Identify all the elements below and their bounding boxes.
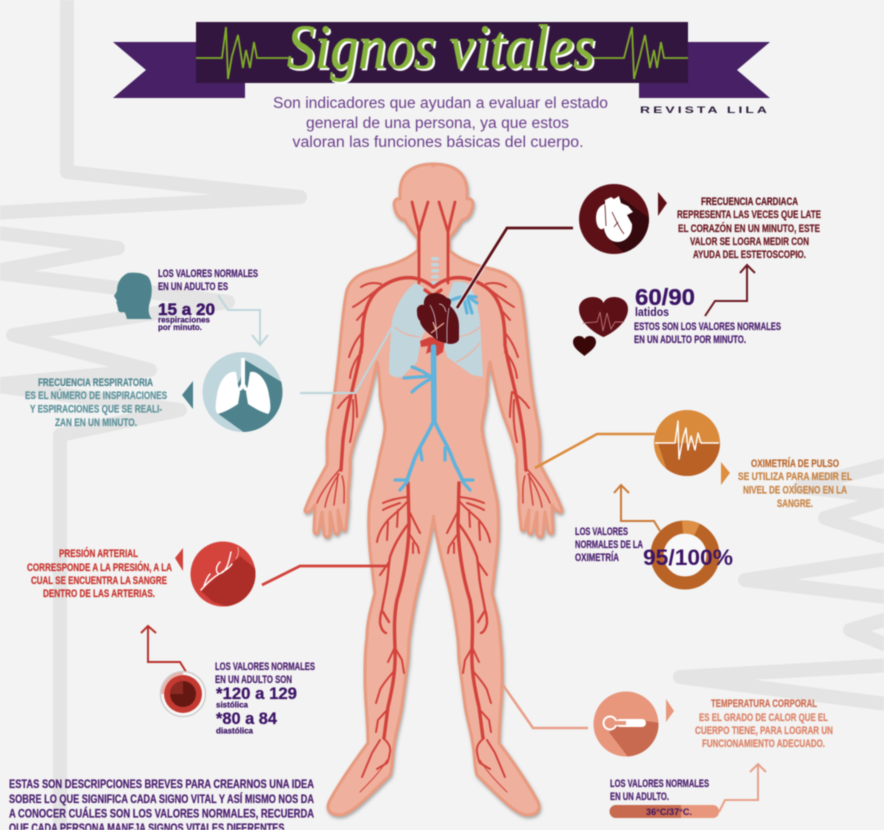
unit: por minuto. [158, 322, 202, 332]
ribbon left tail [113, 42, 245, 98]
description: EL CORAZÓN EN UN MINUTO, ESTE [678, 222, 820, 235]
gauge icon [160, 672, 206, 716]
closing note: A CONOCER CUÁLES SON LOS VALORES NORMALES, RECUERDA [9, 806, 314, 820]
neck artery top join [425, 290, 441, 296]
pointer [182, 381, 193, 409]
ribbon centre [196, 22, 688, 83]
icon: small heart [573, 336, 596, 356]
description: AYUDA DEL ESTETOSCOPIO. [693, 249, 806, 261]
background heartbeat pattern: left [0, 0, 300, 213]
description: REPRESENTA LAS VECES QUE LATE [677, 209, 821, 221]
values text: EN UN ADULTO POR MINUTO. [634, 334, 746, 346]
panel: temperatura corporal [503, 685, 833, 818]
arteries left [317, 202, 433, 792]
description [25, 377, 167, 429]
panel: frecuencia cardiaca [457, 184, 821, 356]
description [738, 457, 852, 510]
description: ZAN EN UN MINUTO. [55, 417, 137, 429]
title: Signos vitales [287, 14, 595, 82]
description: SE UTILIZA PARA MEDIR EL [738, 471, 852, 483]
connector [300, 327, 392, 393]
number: 15 a 20 [158, 300, 215, 319]
adult values text [158, 268, 258, 293]
human body [305, 164, 562, 815]
arrow [705, 265, 755, 316]
description: ES EL NÚMERO DE INSPIRACIONES [25, 389, 167, 402]
values text: EN UN ADULTO. [610, 791, 669, 803]
description: CORRESPONDE A LA PRESIÓN, A LA [27, 561, 172, 574]
panel: presion arterial [27, 542, 390, 736]
arrow [141, 626, 188, 675]
aorta [420, 337, 445, 356]
donut chart [657, 527, 713, 583]
description [695, 698, 833, 750]
values text [610, 778, 709, 803]
connector [535, 434, 655, 468]
panel: oximetria de pulso [535, 410, 852, 583]
unit [158, 314, 210, 332]
pointer [175, 548, 183, 571]
values text: LOS VALORES [575, 526, 628, 538]
arrow [719, 764, 766, 812]
systolic value: sistólica [216, 700, 248, 710]
background heartbeat pattern: right [680, 463, 884, 705]
closing note: ESTAS SON DESCRIPCIONES BREVES PARA CREARNOS UNA IDEA [9, 777, 314, 791]
description: FUNCIONAMIENTO ADECUADO. [702, 738, 825, 750]
icon: head [114, 273, 152, 319]
description [677, 196, 821, 261]
systolic value: *120 a 129 [216, 685, 297, 703]
diastolic value: *80 a 84 [216, 710, 278, 728]
subtitle: valoran las funciones básicas del cuerpo. [292, 134, 584, 151]
unit: respiraciones [158, 314, 210, 324]
lungs [389, 282, 483, 377]
description: FRECUENCIA RESPIRATORIA [38, 377, 153, 389]
heartbeat line left [196, 27, 290, 79]
heartbeat line right [585, 27, 688, 79]
unit: latidos [635, 305, 669, 319]
description [27, 547, 172, 600]
description: TEMPERATURA CORPORAL [711, 698, 817, 710]
closing note [9, 777, 314, 830]
arrow [218, 295, 268, 345]
description: CUAL SE ENCUENTRA LA SANGRE [31, 575, 167, 587]
description: NIVEL DE OXÍGENO EN LA [743, 484, 847, 496]
pointer [721, 462, 730, 485]
description: FRECUENCIA CARDIACA [701, 196, 798, 208]
pointer [658, 192, 667, 216]
icon: pulse [654, 410, 722, 480]
subtitle: Son indicadores que ayudan a evaluar el estado [273, 95, 608, 112]
panel: frecuencia respiratoria [25, 268, 392, 436]
description: DENTRO DE LAS ARTERIAS. [43, 588, 155, 600]
trachea [431, 257, 439, 284]
icon: big heart [579, 297, 628, 337]
background heartbeat pattern: left middle [0, 232, 228, 830]
number: 60/90 [635, 284, 695, 310]
icon: artery [190, 540, 256, 608]
description: CUERPO TIENE, PARA LOGRAR UN [695, 725, 833, 737]
number: 95/100% [643, 545, 733, 570]
heart [417, 293, 459, 344]
values text: LOS VALORES NORMALES [215, 661, 315, 673]
icon: heart [579, 184, 655, 255]
ribbon right tail [639, 42, 770, 98]
subtitle [273, 95, 608, 151]
values text: OXIMETRÍA [575, 551, 619, 564]
closing note: SOBRE LO QUE SIGNIFICA CADA SIGNO VITAL Y ASÍ MISMO NOS DA [9, 791, 314, 806]
description: SANGRE. [777, 498, 813, 510]
values text: NORMALES DE LA [575, 539, 643, 551]
veins [395, 296, 477, 490]
adult values text: EN UN ADULTO ES [158, 281, 228, 293]
temperature bar: 36°C/37°C. [646, 807, 692, 818]
connector [503, 685, 588, 728]
ribbon banner [113, 14, 770, 98]
connector [262, 566, 390, 585]
connector [457, 228, 573, 308]
arrow [614, 485, 660, 531]
arteries right [434, 202, 550, 792]
temperature bar [610, 805, 719, 818]
title: Signos vitales [289, 16, 597, 84]
pointer [666, 699, 674, 722]
adult values text: LOS VALORES NORMALES [158, 268, 258, 280]
diastolic value: diastólica [216, 726, 253, 736]
description: ES EL GRADO DE CALOR QUE EL [699, 712, 828, 724]
description: Y ESPIRACIONES QUE SE REALI- [30, 404, 162, 416]
brand: REVISTA LILA [640, 105, 770, 115]
description: OXIMETRÍA DE PULSO [751, 457, 839, 470]
values text: LOS VALORES NORMALES [610, 778, 709, 790]
values text [215, 661, 315, 686]
values text: EN UN ADULTO SON [215, 674, 292, 686]
values text [575, 526, 643, 564]
body silhouette [305, 164, 562, 815]
icon: lungs [202, 352, 290, 436]
values text [634, 321, 781, 346]
subtitle: general de una persona, ya que estos [306, 115, 569, 132]
values text: ESTOS SON LOS VALORES NORMALES [634, 321, 781, 333]
icon: thermometer [594, 692, 660, 760]
description: VALOR SE LOGRA MEDIR CON [690, 236, 809, 248]
description: PRESIÓN ARTERIAL [59, 547, 138, 560]
